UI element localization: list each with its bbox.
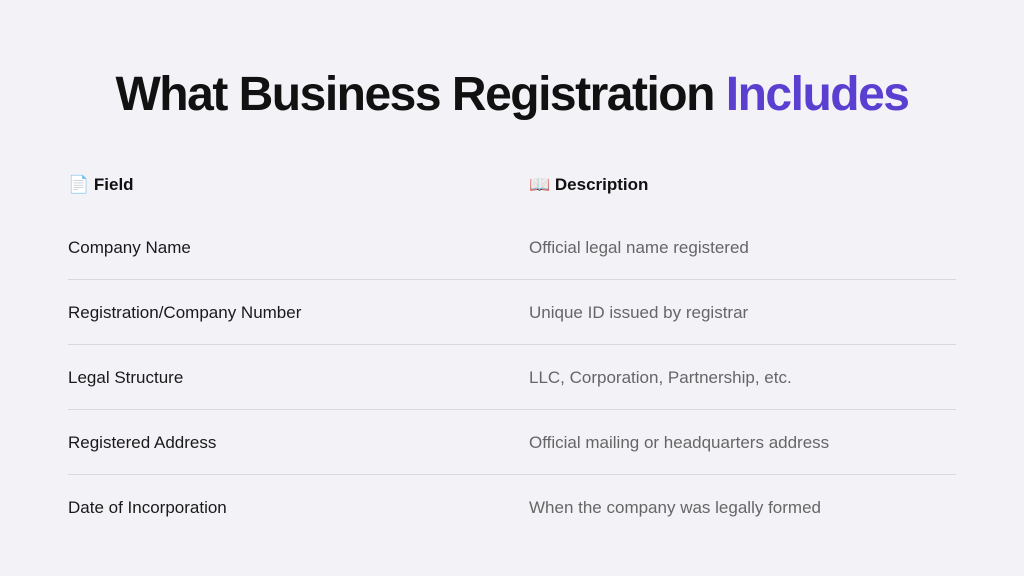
row: registered address xyxy=(68,410,956,475)
header row xyxy=(68,174,648,194)
row: date of incorporation: Date of Incorporation xyxy=(68,498,227,517)
header row: 📄 Field xyxy=(68,175,134,194)
row: registered address: Official mailing or headquarters address xyxy=(529,433,829,452)
title: What Business Registration Includes xyxy=(116,68,908,121)
row: registered address: Registered Address xyxy=(68,433,216,452)
row: legal structure: Legal Structure xyxy=(68,368,183,387)
row: date of incorporation: When the company was legally formed xyxy=(529,498,821,517)
row: company name xyxy=(68,215,956,280)
row: registration number xyxy=(68,280,956,345)
row: legal structure: LLC, Corporation, Partnership, etc. xyxy=(529,368,792,387)
row: date of incorporation xyxy=(68,498,821,517)
row: registration number: Registration/Company Number xyxy=(68,303,301,322)
row: company name: Official legal name registered xyxy=(529,238,749,257)
row: legal structure xyxy=(68,345,956,410)
table xyxy=(68,174,956,517)
header row: 📖 Description xyxy=(529,175,648,194)
row: registration number: Unique ID issued by registrar xyxy=(529,303,748,322)
row: company name: Company Name xyxy=(68,238,191,257)
